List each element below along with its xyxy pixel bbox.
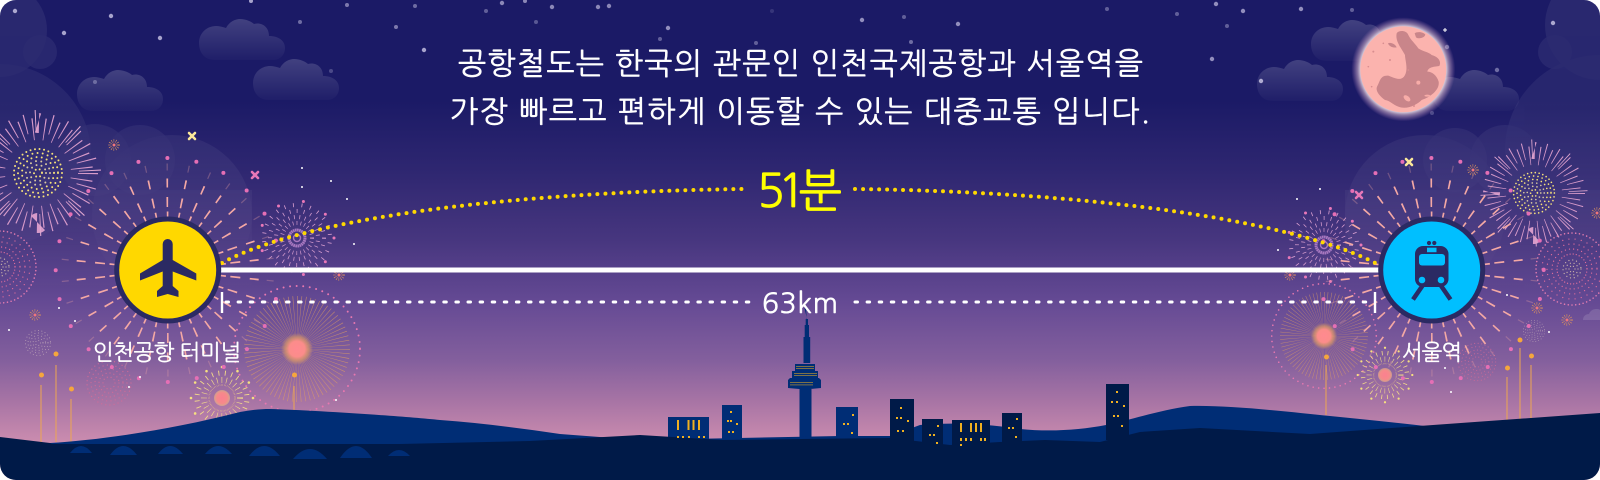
distance dashed line (222, 292, 1375, 313)
blue buildings (668, 405, 858, 439)
large background cloud right (1345, 0, 1600, 226)
N Seoul tower (788, 308, 821, 441)
distance label: 63km (762, 290, 838, 318)
firework: right red dots (1536, 233, 1600, 305)
ground (0, 413, 1600, 480)
firework: left grey dots (26, 330, 50, 356)
station label: 서울역 (1402, 341, 1462, 364)
small clouds right (1257, 20, 1600, 320)
icon: airplane (140, 239, 196, 297)
station marker (1378, 216, 1485, 324)
firework: right grey dots (1523, 320, 1545, 342)
firework rockets left (39, 352, 297, 442)
intro text (450, 48, 1150, 127)
firework: left red dots (0, 231, 36, 303)
bridge arches (70, 446, 410, 459)
firework: right yellow (1358, 348, 1412, 402)
firework: right purple (1287, 208, 1361, 282)
back hills (50, 406, 1424, 445)
firework: right large pink and yellow (1490, 149, 1578, 237)
travel time label: 51분 (757, 168, 842, 214)
firework: left purple (260, 201, 334, 275)
small clouds left (77, 19, 339, 111)
intro text: 가장 빠르고 편하게 이동할 수 있는 대중교통 입니다. (450, 97, 1150, 127)
firework rockets right (1324, 338, 1534, 424)
airport marker (114, 216, 221, 324)
icon: train (1413, 241, 1450, 300)
firework: left orange (234, 286, 360, 412)
route line (221, 268, 1381, 272)
dark buildings (890, 384, 1129, 448)
firework: left pink dots (87, 361, 131, 405)
building windows (677, 391, 1125, 446)
airport label: 인천공항 터미널 (93, 341, 241, 364)
firework: left large pink and yellow (0, 121, 90, 225)
intro text: 공항철도는 한국의 관문인 인천국제공항과 서울역을 (458, 48, 1143, 79)
large background cloud left (0, 0, 252, 226)
firework: right orange (1272, 284, 1376, 388)
travel time arc (222, 189, 1379, 265)
firework: left yellow (191, 367, 253, 429)
night stars (13, 0, 1555, 115)
firework: burst around airport (56, 158, 280, 382)
firework: burst around station (1320, 158, 1544, 382)
moon (1351, 17, 1455, 121)
sparks and cross marks (8, 133, 1600, 401)
firework: right pink dots (1458, 343, 1496, 381)
